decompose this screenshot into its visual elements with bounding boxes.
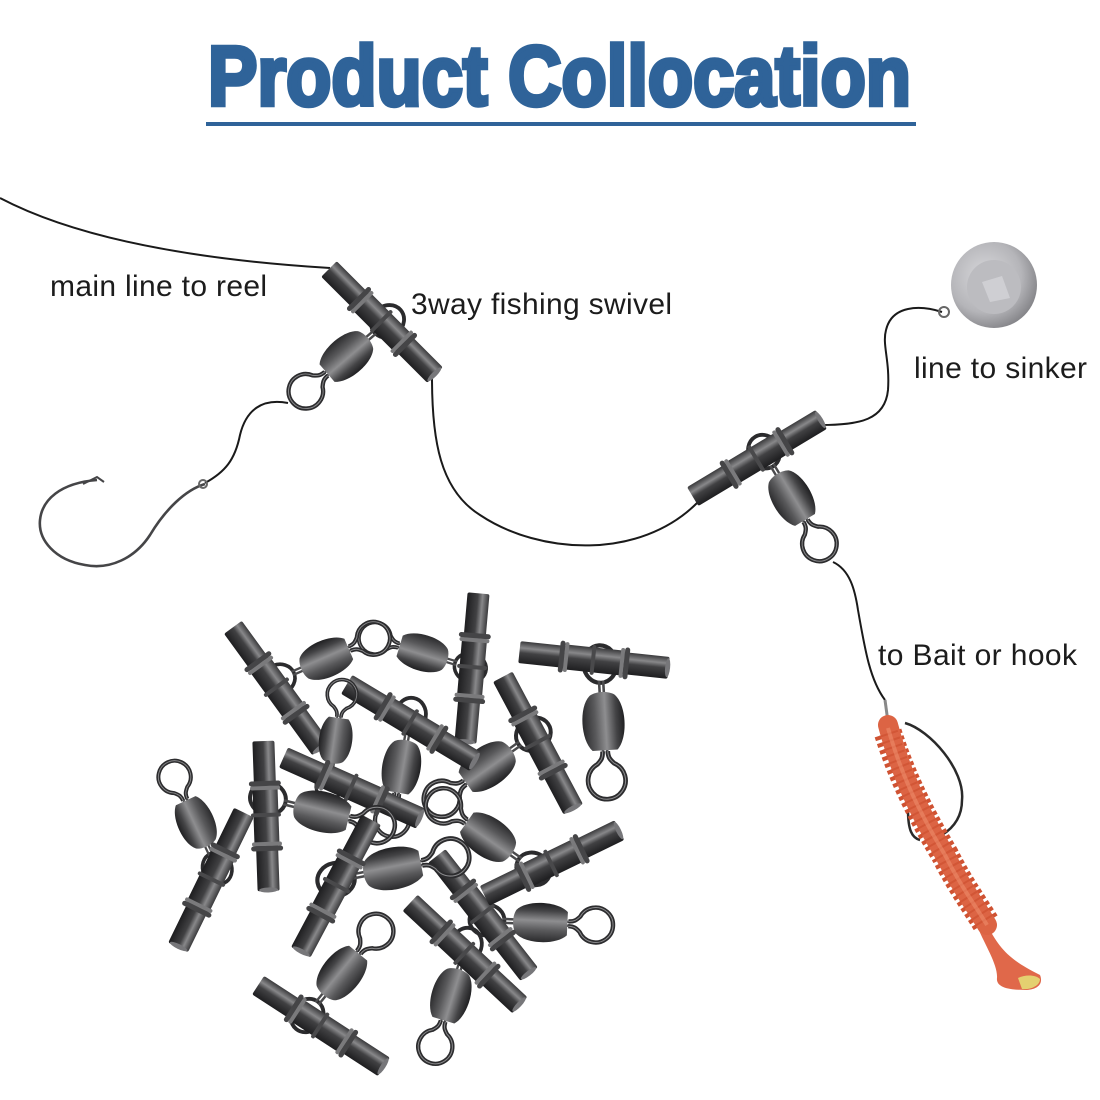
swivel J bbox=[418, 779, 628, 910]
label: to Bait or hook: to Bait or hook bbox=[878, 639, 1078, 672]
swivel E bbox=[277, 677, 428, 834]
fishing lines bbox=[0, 198, 942, 700]
icon: sinker bbox=[939, 242, 1037, 328]
swivel B bbox=[220, 615, 396, 759]
soft bait with hook bbox=[885, 700, 1041, 990]
swivel C bbox=[354, 592, 494, 746]
title: Product Collocation bbox=[208, 29, 911, 123]
label: main line to reel: main line to reel bbox=[50, 270, 267, 303]
swivel F bbox=[415, 669, 588, 826]
swivel I bbox=[286, 812, 473, 961]
swivel M bbox=[249, 905, 402, 1081]
title underline bbox=[206, 122, 916, 126]
label: 3way fishing swivel: 3way fishing swivel bbox=[411, 288, 672, 321]
swivel L bbox=[399, 891, 532, 1069]
label: line to sinker: line to sinker bbox=[914, 352, 1087, 385]
swivel near sinker bbox=[684, 405, 845, 569]
swivel K bbox=[424, 846, 614, 985]
swivel on main line bbox=[280, 258, 447, 417]
pile of swivels bbox=[151, 592, 672, 1081]
icon: fishing hook bbox=[40, 477, 207, 566]
swivel H bbox=[246, 740, 399, 893]
swivel D bbox=[338, 671, 485, 840]
swivel A bbox=[518, 636, 672, 800]
swivel G bbox=[151, 755, 258, 956]
